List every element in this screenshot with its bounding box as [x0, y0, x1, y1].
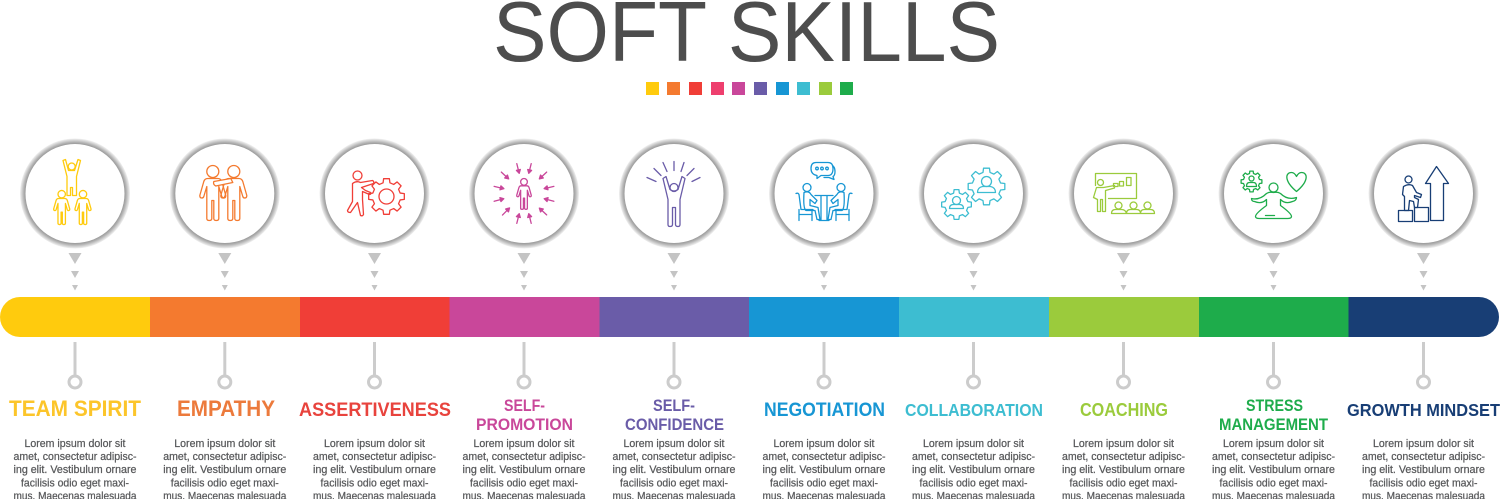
- body text: facilisis odio eget maxi-: [620, 478, 728, 490]
- body text: amet, consectetur adipisc-: [1212, 451, 1335, 463]
- panel: collaboration: [905, 138, 1043, 499]
- heading: ASSERTIVENESS: [299, 399, 451, 421]
- pointer triangles: [518, 253, 530, 290]
- body text: ing elit. Vestibulum ornare: [762, 464, 886, 476]
- body text: amet, consectetur adipisc-: [1062, 451, 1185, 463]
- pointer triangles: [1117, 253, 1130, 290]
- body text: [1062, 438, 1186, 499]
- connector stem: [368, 342, 380, 388]
- heading: SELF-: [653, 396, 695, 415]
- body text: facilisis odio eget maxi-: [21, 478, 129, 490]
- heading: CONFIDENCE: [625, 415, 724, 434]
- icon: growth mindset in circle: [1368, 138, 1478, 248]
- body text: amet, consectetur adipisc-: [612, 451, 736, 463]
- body text: [462, 438, 586, 499]
- body text: ing elit. Vestibulum ornare: [14, 464, 136, 476]
- body text: amet, consectetur adipisc-: [462, 451, 586, 463]
- icon: coaching in circle: [1068, 138, 1178, 248]
- colour squares row: [646, 82, 853, 95]
- body text: facilisis odio eget maxi-: [320, 478, 429, 490]
- body text: amet, consectetur adipisc-: [14, 451, 137, 463]
- body text: facilisis odio eget maxi-: [171, 478, 279, 490]
- body text: Lorem ipsum dolor sit: [474, 438, 574, 450]
- panel: team spirit: [9, 138, 142, 499]
- body text: Lorem ipsum dolor sit: [774, 438, 874, 450]
- body text: Lorem ipsum dolor sit: [24, 438, 126, 450]
- heading: NEGOTIATION: [764, 400, 885, 421]
- panel: stress management: [1212, 138, 1336, 499]
- body text: ing elit. Vestibulum ornare: [1062, 464, 1185, 476]
- body text: [1362, 438, 1486, 499]
- connector stem: [219, 342, 231, 388]
- pointer triangles: [967, 253, 980, 290]
- heading: [1219, 396, 1329, 434]
- body text: [163, 438, 287, 499]
- body text: Lorem ipsum dolor sit: [1373, 438, 1474, 450]
- connector stem: [1268, 342, 1280, 388]
- body text: ing elit. Vestibulum ornare: [1212, 464, 1335, 476]
- icon: team spirit in circle: [20, 138, 130, 248]
- heading: COACHING: [1080, 400, 1168, 420]
- body text: ing elit. Vestibulum ornare: [912, 464, 1035, 476]
- pointer triangles: [68, 253, 82, 290]
- body text: amet, consectetur adipisc-: [912, 451, 1035, 463]
- body text: ing elit. Vestibulum ornare: [612, 464, 736, 476]
- body text: amet, consectetur adipisc-: [163, 451, 287, 463]
- body text: Lorem ipsum dolor sit: [923, 438, 1024, 450]
- body text: [14, 438, 137, 499]
- panel: self-promotion: [462, 138, 586, 499]
- timeline bar: [0, 297, 1499, 337]
- body text: facilisis odio eget maxi-: [470, 478, 578, 490]
- body text: [1212, 438, 1336, 499]
- body text: Lorem ipsum dolor sit: [174, 438, 275, 450]
- panel: empathy: [163, 138, 287, 499]
- panel: self-confidence: [612, 138, 736, 499]
- icon: collaboration in circle: [918, 138, 1028, 248]
- icon: negotiation in circle: [769, 138, 879, 248]
- pointer triangles: [818, 253, 830, 290]
- heading: STRESS: [1246, 396, 1303, 415]
- connector stem: [818, 342, 830, 388]
- icon: self-promotion in circle: [469, 138, 579, 248]
- connector stem: [968, 342, 980, 388]
- body text: [912, 438, 1036, 499]
- body text: Lorem ipsum dolor sit: [1223, 438, 1324, 450]
- body text: amet, consectetur adipisc-: [313, 451, 436, 463]
- panel: coaching: [1062, 138, 1186, 499]
- heading: TEAM SPIRIT: [9, 396, 142, 421]
- body text: facilisis odio eget maxi-: [920, 478, 1028, 490]
- body text: [612, 438, 736, 499]
- pointer triangles: [1267, 253, 1280, 290]
- body text: amet, consectetur adipisc-: [1362, 451, 1485, 463]
- icon: self-confidence in circle: [619, 138, 729, 248]
- body text: ing elit. Vestibulum ornare: [1362, 464, 1485, 476]
- body text: facilisis odio eget maxi-: [1220, 478, 1328, 490]
- panel: growth mindset: [1347, 138, 1500, 499]
- body text: [313, 438, 437, 499]
- pointer triangles: [218, 253, 231, 290]
- pointer triangles: [1417, 253, 1430, 290]
- connector stem: [518, 342, 530, 388]
- panel: negotiation: [762, 138, 886, 499]
- icon: stress management in circle: [1218, 138, 1328, 248]
- connector stem: [668, 342, 680, 388]
- heading: SELF-: [504, 396, 545, 415]
- body text: Lorem ipsum dolor sit: [624, 438, 724, 450]
- body text: [762, 438, 886, 499]
- body text: facilisis odio eget maxi-: [1070, 478, 1178, 490]
- connector stem: [69, 342, 81, 388]
- icon: assertiveness in circle: [320, 138, 430, 248]
- body text: Lorem ipsum dolor sit: [1073, 438, 1174, 450]
- body text: ing elit. Vestibulum ornare: [462, 464, 586, 476]
- heading: EMPATHY: [177, 396, 275, 421]
- pointer triangles: [668, 253, 680, 290]
- heading: [476, 396, 573, 434]
- body text: Lorem ipsum dolor sit: [324, 438, 425, 450]
- panel: assertiveness: [299, 138, 451, 499]
- connector stem: [1118, 342, 1130, 388]
- body text: facilisis odio eget maxi-: [770, 478, 878, 490]
- connector stem: [1418, 342, 1430, 388]
- body text: ing elit. Vestibulum ornare: [163, 464, 286, 476]
- heading: PROMOTION: [476, 415, 573, 434]
- heading: MANAGEMENT: [1219, 415, 1329, 434]
- heading: [625, 396, 724, 434]
- body text: facilisis odio eget maxi-: [1370, 478, 1478, 490]
- heading: COLLABORATION: [905, 400, 1043, 420]
- pointer triangles: [368, 253, 381, 290]
- icon: empathy in circle: [170, 138, 280, 248]
- body text: ing elit. Vestibulum ornare: [313, 464, 436, 476]
- body text: amet, consectetur adipisc-: [762, 451, 886, 463]
